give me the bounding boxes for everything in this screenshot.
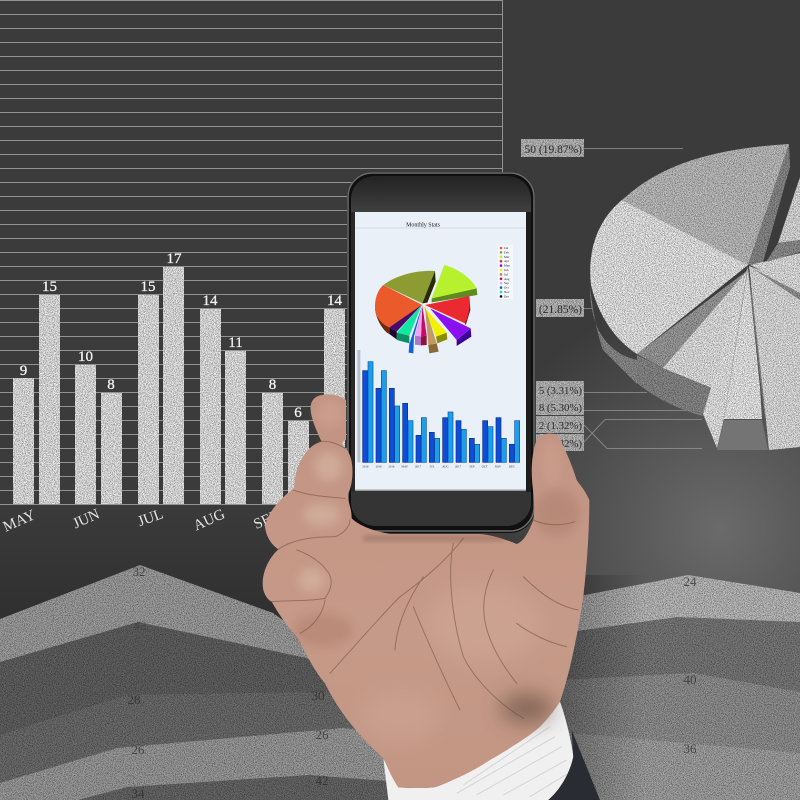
bar chart on screen: NOV (495, 464, 502, 468)
pie legend: Jul (504, 272, 508, 276)
bar chart: monthly values on the board: JUL (136, 506, 166, 530)
pie legend: Sep (504, 281, 509, 285)
bar chart on screen: 2017 (415, 464, 421, 468)
pie legend: Mar (504, 255, 510, 259)
band value labels: 40 (684, 672, 696, 687)
bar chart on screen (357, 350, 520, 468)
bar chart: monthly values on the board: 15 (140, 279, 156, 295)
hand silhouette (263, 394, 589, 788)
band value labels: 36 (684, 741, 697, 756)
label boxes: 5 (3.31%) (539, 385, 582, 397)
area chart: layered mountain bands left (0, 565, 400, 800)
leader lines (584, 148, 702, 448)
pie legend: Jun (504, 268, 509, 272)
band value labels (128, 564, 697, 800)
palm shading (293, 490, 580, 743)
screen title: Monthly Stats (406, 222, 441, 228)
bar chart on screen: 2016 (388, 464, 395, 468)
pie legend: Oct (504, 286, 509, 290)
label boxes: 8 (5.30%) (539, 402, 582, 414)
band value labels: 42 (134, 618, 146, 633)
bar chart: monthly values on the board: 10 (78, 349, 93, 365)
bar chart on screen: DEC (509, 464, 515, 468)
bar chart: monthly values on the board: 15 (42, 279, 57, 295)
bar chart on screen: 2016 (376, 464, 382, 468)
pie legend: Aug (504, 277, 510, 281)
label boxes: 2 (1.32%) (539, 438, 582, 450)
phone screen (355, 212, 526, 491)
band value labels: 42 (316, 773, 328, 788)
label boxes: 50 (19.87%) (524, 144, 582, 156)
label boxes: (21.85%) (539, 304, 582, 316)
bar chart on screen: 2016 (362, 464, 369, 468)
band value labels: 26 (316, 727, 329, 742)
bar chart: monthly values on the board: 8 (107, 377, 115, 393)
bar chart: monthly values on the board: SEP (251, 508, 281, 533)
bar chart on screen: JUL (429, 464, 435, 468)
grid lines (0, 0, 502, 504)
bar chart: monthly values on the board: 17 (166, 251, 182, 267)
bar chart: monthly values on the board: 8 (269, 377, 276, 393)
pie legend: May (504, 264, 510, 268)
pie legend (498, 245, 513, 299)
bar chart: monthly values on the board: AUG (191, 506, 228, 534)
pie legend: Apr (504, 259, 510, 263)
bar chart: monthly values on the board: JUN (71, 506, 102, 532)
hand holding the phone (263, 394, 600, 800)
bar chart on screen: SEP (469, 464, 475, 468)
label boxes: 2 (1.32%) (539, 420, 582, 432)
bar chart: monthly values on the board: 9 (20, 363, 27, 379)
bar chart: monthly values on the board (1, 251, 345, 535)
pie chart: large 3D pie on the board (590, 144, 800, 450)
band value labels: 24 (684, 574, 697, 589)
label boxes (521, 139, 584, 451)
area chart: layered mountain bands right (560, 575, 800, 800)
band value labels: 32 (132, 564, 146, 579)
pie legend: Dec (504, 294, 510, 298)
bar chart on screen: MAY (401, 464, 409, 468)
suit sleeve (548, 730, 600, 800)
band value labels: 28 (128, 692, 140, 707)
bar chart: monthly values on the board: MAY (1, 507, 38, 535)
band value labels: 26 (132, 742, 145, 757)
bar chart on screen: OCT (482, 464, 488, 468)
finger details (272, 400, 575, 633)
bar chart: monthly values on the board: 6 (294, 405, 302, 421)
bar chart: monthly values on the board: 14 (327, 293, 342, 309)
bar chart: monthly values on the board: 11 (228, 335, 243, 351)
pie legend: Feb (504, 250, 509, 254)
pie shadow block (717, 420, 768, 450)
pie legend: Jan (504, 246, 509, 250)
pie chart on screen (375, 265, 477, 353)
bar chart on screen: 2017 (455, 464, 461, 468)
shirt cuff (383, 702, 573, 800)
bar chart: monthly values on the board: 14 (202, 293, 218, 309)
smartphone (347, 172, 535, 533)
pie legend: Nov (504, 290, 510, 294)
palm creases (330, 538, 578, 718)
bar chart on screen: AUG (442, 464, 449, 468)
band value labels: 30 (312, 688, 324, 703)
